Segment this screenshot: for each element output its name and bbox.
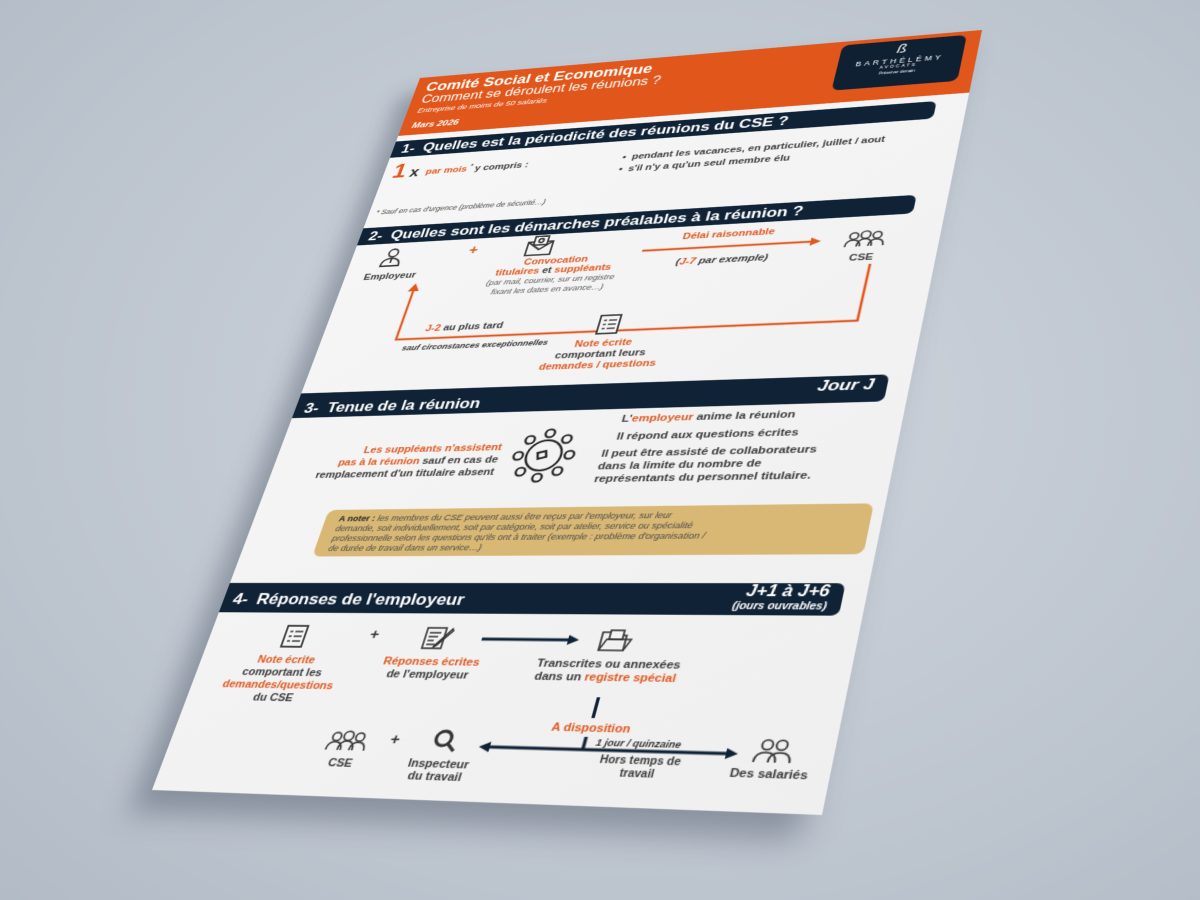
callout: a noter: demande, soit individuellement, soit par catégorie, soit par atelier, service ou spécialité — [334, 521, 694, 533]
section 1 heading — [390, 101, 937, 158]
section 4 heading: 4- Réponses de l'employeur — [230, 590, 467, 609]
distribution arrows — [478, 736, 738, 760]
text: transcrites: dans un registre spécial — [533, 671, 677, 685]
icon: round table — [512, 428, 576, 484]
label: J-2: J-2 au plus tard — [424, 321, 505, 334]
icon: CSE group — [843, 230, 884, 248]
icon: note écrite — [594, 314, 623, 335]
text: assisté: Il peut être assisté de collaborateurs — [600, 444, 818, 460]
logo: BARTHÉLÉMY — [855, 53, 945, 68]
connector — [591, 697, 600, 718]
icon: réponses écrites — [420, 626, 456, 650]
label: hors temps — [598, 754, 682, 781]
logo: Préserver demain — [879, 69, 915, 75]
text: assisté: dans la limite du nombre de — [596, 458, 763, 472]
logo: AVOCATS — [879, 63, 917, 70]
scope: Entreprise de moins de 50 salariés — [416, 97, 548, 115]
title: Comité Social et Economique — [424, 61, 655, 94]
header band — [398, 30, 982, 136]
section 3 heading: Jour J — [816, 376, 876, 394]
section 1 frequency: x — [407, 165, 422, 180]
section 1 bullets — [617, 135, 886, 174]
label: hors temps: Hors temps de — [598, 754, 682, 769]
text: note écrite: demandes / questions — [537, 358, 657, 372]
text: assisté: représentants du personnel titulaire. — [593, 470, 812, 485]
text: convocation: Convocation — [522, 254, 589, 267]
text: employeur role — [615, 409, 800, 442]
footnote: * Sauf en cas d'urgence (problème de sécurité…) — [375, 198, 547, 216]
text: transcrites — [446, 634, 682, 685]
section 4 heading: (jours ouvrables) — [731, 601, 828, 613]
text: transcrites: Transcrites ou annexées — [535, 658, 682, 672]
icon: note écrite 4 — [280, 624, 310, 648]
section 2 heading — [357, 195, 917, 245]
label: inspecteur: Inspecteur — [406, 757, 471, 772]
callout: a noter: professionnelle selon les questions qu'ils ont à traiter (exemple : problème d'organisation / — [331, 531, 706, 543]
label: salariés: Des salariés — [728, 767, 809, 783]
text: note écrite: comportant leurs — [553, 348, 647, 361]
text: note écrite: Note écrite — [573, 337, 633, 350]
plus: + — [388, 731, 403, 749]
arrow — [446, 634, 580, 646]
icon: CSE 4 — [324, 730, 366, 751]
section 4 heading: J+1 à J+6 — [744, 583, 832, 600]
text: réponses: de l'employeur — [385, 668, 470, 682]
icon: folder — [446, 629, 633, 652]
text: suppléants: pas à la réunion sauf en cas de — [336, 455, 500, 468]
text: suppléants: remplacement d'un titulaire absent — [314, 467, 496, 481]
callout: a noter: A noter : les membres du CSE peuvent aussi être reçus par l'employeur, sur leur — [338, 510, 673, 523]
section 3 heading — [292, 374, 890, 418]
text: convocation: fixant les dates en avance…) — [490, 283, 605, 296]
label: J-7: (J-7 par exemple) — [674, 253, 769, 267]
text: réponses — [382, 656, 481, 682]
label: CSE: CSE — [848, 252, 874, 263]
icon: employeur — [378, 248, 400, 268]
section 2 heading: 2- Quelles sont les démarches préalables à la réunion ? — [366, 203, 805, 243]
subtitle: Comment se déroulent les réunions ? — [420, 74, 662, 106]
logo — [831, 35, 967, 91]
icon: convocation — [523, 235, 555, 256]
label: délai: Délai raisonnable — [681, 227, 776, 242]
label: CSE 4: CSE — [326, 757, 354, 770]
label: hors temps: travail — [618, 768, 655, 781]
text: note écrite 4 — [221, 654, 335, 704]
label: a disposition: A disposition — [550, 721, 632, 736]
label: employeur: Employeur — [362, 270, 417, 282]
section 1 frequency — [389, 160, 530, 182]
arrow: délai raisonnable — [642, 237, 822, 252]
section 1 bullets: • pendant les vacances, en particulier, juillet / aout — [621, 135, 886, 162]
label: 1 jour: 1 jour / quinzaine — [595, 737, 682, 750]
section 3 heading: 3- Tenue de la réunion — [302, 395, 483, 416]
text: convocation — [485, 254, 616, 296]
text: note écrite 4: demandes/questions — [221, 678, 335, 692]
text: réponses: Réponses écrites — [382, 656, 481, 669]
icon: salariés — [752, 738, 792, 764]
label: sauf circonstances: sauf circonstances exceptionnelles — [401, 338, 549, 352]
document sheet — [152, 30, 982, 815]
callout: a noter: de durée de travail dans un service…) — [327, 543, 483, 553]
text: suppléants — [314, 442, 503, 481]
section 4 heading — [219, 583, 846, 616]
return path lines — [394, 264, 872, 342]
text: convocation: titulaires et suppléants — [494, 263, 612, 278]
text: employeur role: L'employeur anime la réunion — [620, 409, 797, 425]
text: note écrite 4: comportant les — [240, 666, 324, 679]
section 1 heading: 1- Quelles est la périodicité des réunions du CSE ? — [399, 113, 790, 156]
label: inspecteur — [406, 757, 471, 784]
section 1 bullets: • s'il n'y a qu'un seul membre élu — [617, 153, 791, 174]
icon: magnifier — [434, 728, 456, 752]
text: suppléants: Les suppléants n'assistent — [362, 442, 503, 456]
plus: + — [467, 244, 480, 257]
section 1 frequency: par mois * y compris : — [424, 160, 530, 176]
plus: + — [368, 626, 382, 643]
text: convocation: (par mail, courrier, sur un registre — [485, 273, 616, 287]
text: note écrite — [537, 337, 657, 372]
logo: ß — [896, 43, 908, 56]
callout: a noter — [312, 503, 874, 557]
text: note écrite 4: du CSE — [251, 692, 295, 704]
text: assisté — [593, 444, 818, 485]
text: employeur role: Il répond aux questions écrites — [615, 427, 800, 442]
date: Mars 2026 — [410, 118, 460, 130]
text: note écrite 4: Note écrite — [256, 654, 317, 666]
section 1 frequency: 1 — [389, 160, 411, 182]
label: inspecteur: du travail — [406, 770, 463, 784]
